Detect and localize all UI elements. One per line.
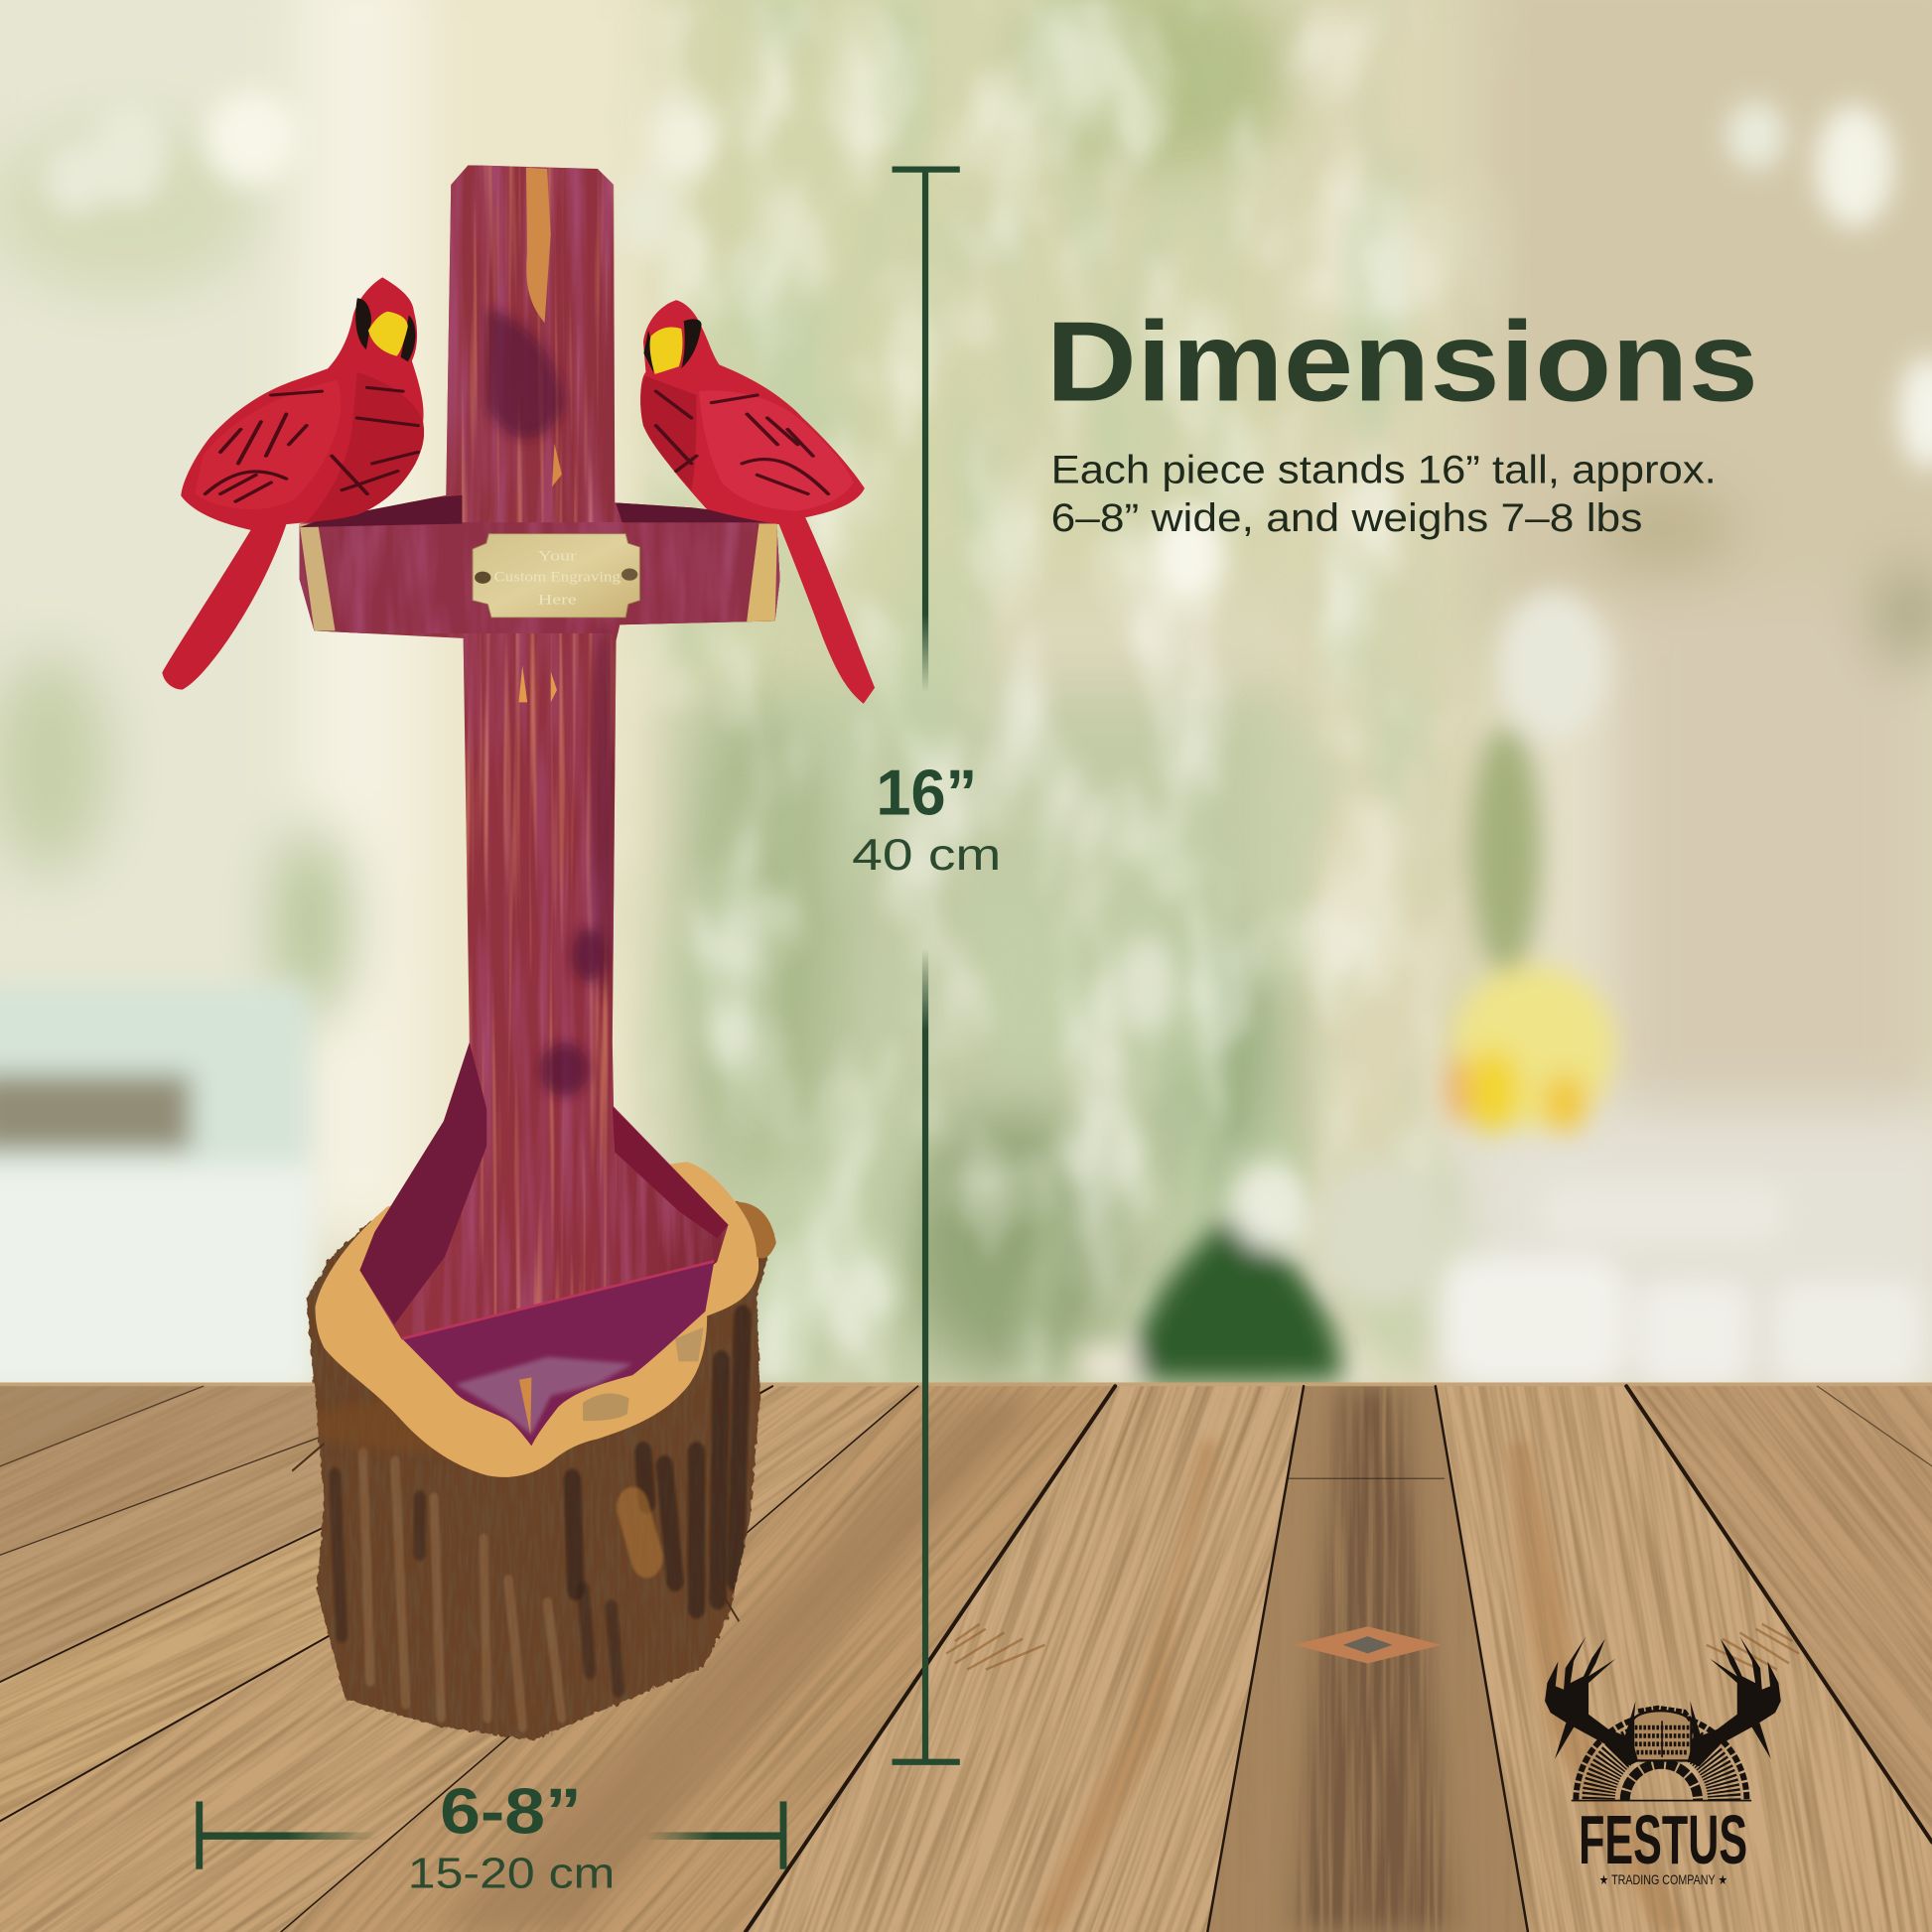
height label: 16”: 16” [876, 757, 977, 828]
description text: 6–8” wide, and weighs 7–8 lbs [1051, 496, 1642, 540]
brass plaque: Your [538, 547, 577, 564]
description text: Each piece stands 16” tall, approx. [1051, 448, 1717, 491]
logo: Festus Trading Company [1545, 1636, 1781, 1887]
brass plaque: Here [538, 591, 577, 608]
icon: turkey fan [1573, 1706, 1749, 1800]
blurred garden background [0, 0, 1932, 1405]
seat hollow [402, 1261, 714, 1446]
brass plaque: Custom Engraving [493, 568, 621, 585]
width dimension line [196, 1801, 786, 1869]
cross body [283, 148, 801, 1355]
logo tagline: ★ TRADING COMPANY ★ [1599, 1872, 1727, 1887]
height dimension line [893, 167, 960, 1765]
product: carved cedar cross with cardinals on a stump [162, 148, 875, 1744]
width label: 15-20 cm: 15-20 cm [408, 1850, 615, 1897]
brass plaque [473, 534, 639, 618]
plank knots [946, 1624, 1799, 1670]
description text [1051, 449, 1717, 540]
logo wordmark: FESTUS [1579, 1801, 1747, 1878]
icon: left antler [1545, 1636, 1638, 1766]
stump cut top [315, 1162, 776, 1477]
icon: left cardinal [162, 277, 424, 690]
icon: right cardinal [640, 300, 875, 704]
icon: right antler [1688, 1636, 1781, 1766]
width label: 6-8”: 6-8” [440, 1776, 582, 1848]
wooden floor planks [0, 1382, 1932, 1932]
stump bark [292, 1202, 774, 1744]
title: Dimensions [1046, 299, 1758, 425]
height label: 40 cm: 40 cm [852, 831, 1001, 880]
